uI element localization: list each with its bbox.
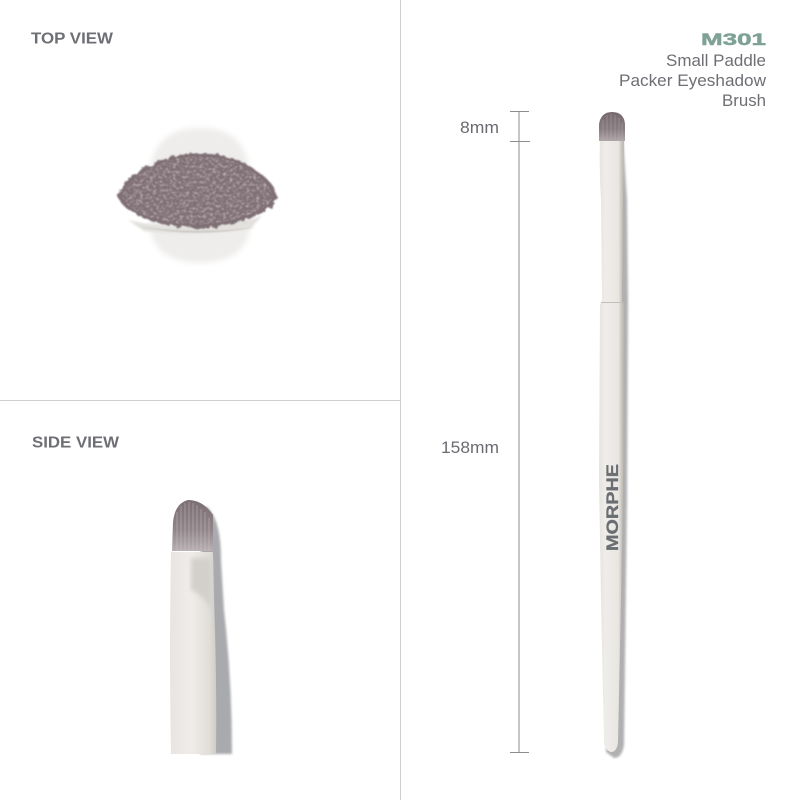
side view shadow — [200, 506, 232, 754]
product name: Packer Eyeshadow — [619, 72, 766, 90]
brush shadow — [606, 120, 628, 758]
product name: Brush — [722, 92, 766, 110]
product name — [619, 52, 766, 110]
brush handle joint — [601, 302, 623, 304]
bristles from above — [118, 153, 277, 228]
product title block — [619, 30, 766, 110]
product name: Small Paddle — [666, 52, 766, 70]
panel divider: horizontal — [0, 400, 400, 401]
logo on handle: MORPHE — [603, 464, 622, 551]
ferrule seen from above — [128, 128, 262, 263]
product code: M301 — [701, 30, 766, 49]
brush handle — [599, 141, 624, 752]
heading: top view: TOP VIEW — [31, 30, 113, 48]
label: 8mm: 8mm — [460, 119, 499, 137]
photo: brush top view — [118, 128, 277, 263]
photo: full brush — [599, 112, 628, 758]
heading: side view: SIDE VIEW — [32, 434, 119, 452]
side view handle — [170, 552, 216, 754]
label: 158mm: 158mm — [441, 439, 499, 457]
panel divider: vertical — [400, 0, 401, 800]
measurement scale — [441, 111, 530, 753]
side view ferrule crease — [191, 558, 212, 612]
brush bristles — [599, 112, 625, 141]
photo: brush side view — [170, 500, 232, 754]
side view bristles — [172, 500, 213, 551]
